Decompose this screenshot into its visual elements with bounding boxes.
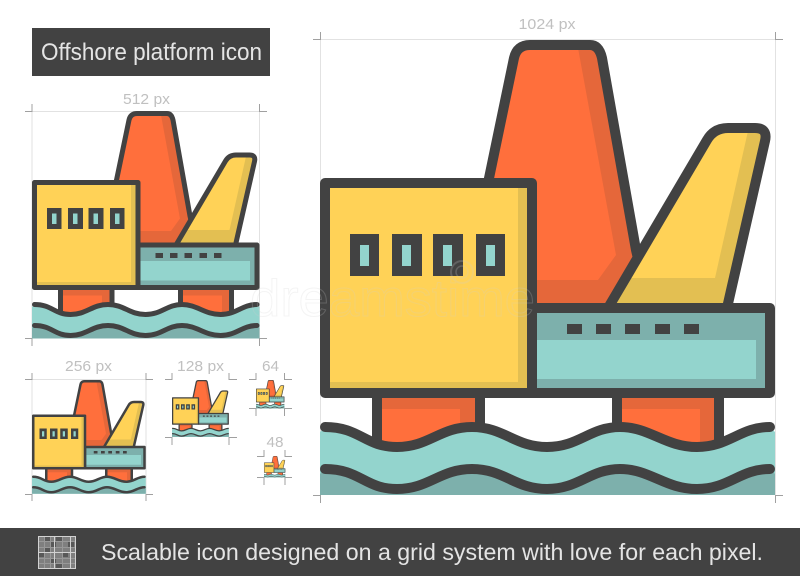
water bbox=[320, 427, 775, 495]
icon: offshore platform, 1024 px bbox=[320, 45, 775, 495]
icon: pixel grid bbox=[38, 536, 76, 569]
small tower bbox=[608, 128, 766, 308]
size guide: 1024 px: 1024 px bbox=[518, 16, 576, 33]
main tower bbox=[480, 45, 650, 310]
icon: offshore platform, 512 px bbox=[32, 114, 260, 338]
footer bar bbox=[0, 528, 800, 576]
size guide: 128 px: 128 px bbox=[177, 358, 225, 375]
right leg bbox=[617, 393, 719, 453]
icon: offshore platform, 128 px bbox=[172, 381, 229, 437]
size guide: 48 px bbox=[257, 434, 292, 485]
deck bbox=[532, 308, 770, 393]
size guide: 256 px: 256 px bbox=[65, 358, 113, 375]
size guide: 256 px bbox=[25, 358, 153, 501]
icon: offshore platform, 256 px bbox=[32, 381, 146, 494]
title banner: Offshore platform icon bbox=[41, 39, 262, 66]
size guide: 64 px bbox=[249, 358, 292, 416]
size guide: 128 px bbox=[165, 358, 237, 445]
size guide: 64 px: 64 bbox=[262, 358, 279, 375]
watermark: dreamstime bbox=[250, 270, 535, 328]
title banner bbox=[32, 28, 270, 76]
building windows bbox=[350, 234, 505, 276]
size guide: 48 px: 48 bbox=[266, 434, 284, 451]
left leg bbox=[377, 393, 480, 453]
size guide: 512 px bbox=[25, 91, 267, 346]
main building bbox=[325, 183, 532, 393]
icon: offshore platform, 64 px bbox=[256, 380, 284, 408]
footer tagline: Scalable icon designed on a grid system with love for each pixel. bbox=[101, 539, 763, 565]
size guide: 512 px: 512 px bbox=[123, 91, 171, 108]
icon: offshore platform, 48 px bbox=[264, 456, 285, 477]
